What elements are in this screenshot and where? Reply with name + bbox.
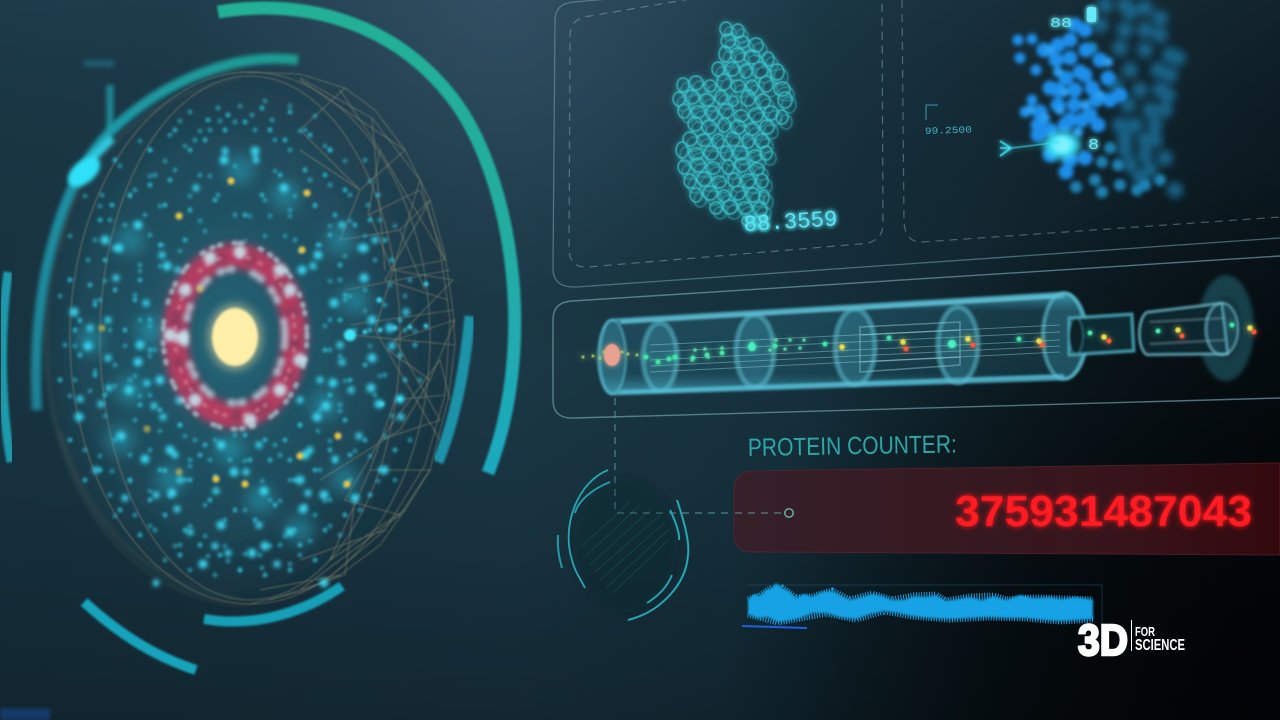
logo: 3D for science [1078, 616, 1185, 665]
icon: arrow pointer [1000, 141, 1060, 156]
logo: 3D for science: SCIENCE [1135, 637, 1185, 654]
logo: 3D for science: 3D [1078, 616, 1128, 665]
molecule labels: 8 [1088, 137, 1099, 154]
panel: upper frame [553, 0, 1280, 287]
cyan proteins: bright [129, 284, 426, 404]
molecule labels [1050, 7, 1099, 154]
ring: outer green arc [218, 8, 515, 473]
molecule readout: 88.3559: 88.3559 [743, 206, 838, 238]
bottom left fragment [0, 708, 50, 720]
cyan proteins: far small [60, 101, 420, 575]
molecule: blue ball model [1018, 5, 1178, 192]
ring: inner arc [36, 59, 298, 410]
counter: red panel [734, 463, 1280, 555]
ring: bottom arcs [84, 586, 342, 670]
connector: dashed line to counter [615, 398, 735, 513]
ring: right short arc [438, 316, 470, 462]
logo: 3D for science: FOR [1135, 624, 1155, 639]
small cylinder stage 1 [1069, 314, 1134, 355]
panel: tube frame [553, 256, 1280, 418]
molecule: wireframe surface [673, 22, 796, 231]
cyan proteins: large [74, 151, 406, 583]
readout: 99.2500 with bracket [925, 105, 972, 137]
sphere: protein cell [44, 72, 455, 604]
main cylinder body [598, 293, 1087, 394]
waveform progress bar [742, 626, 807, 628]
hud bits upper left [62, 60, 114, 193]
waveform [748, 583, 1102, 625]
red protein ring [163, 243, 307, 429]
icon: circular gauge [558, 470, 688, 620]
counter: digits: 375931487043 [955, 487, 1252, 536]
sphere wireframe [46, 72, 250, 604]
inner beam rods [650, 322, 1060, 372]
heading: protein counter: PROTEIN COUNTER: [748, 430, 957, 462]
ring: left arc [2, 272, 11, 462]
panel: dashed molecule frame right [902, 0, 1280, 242]
panel: dashed molecule frame left [569, 0, 883, 267]
small cylinder stage 2 [1139, 303, 1238, 355]
tube: accelerator cylinder [583, 275, 1254, 394]
molecule labels: 88 [1050, 16, 1072, 32]
tube particles [583, 325, 1254, 366]
readout: 99.2500 with bracket: 99.2500 [925, 124, 972, 137]
cyan clouds [90, 170, 355, 530]
yellow proteins [102, 181, 347, 484]
nucleus [207, 303, 263, 371]
outer disk at right end [1198, 275, 1254, 381]
sphere haze [44, 76, 436, 600]
